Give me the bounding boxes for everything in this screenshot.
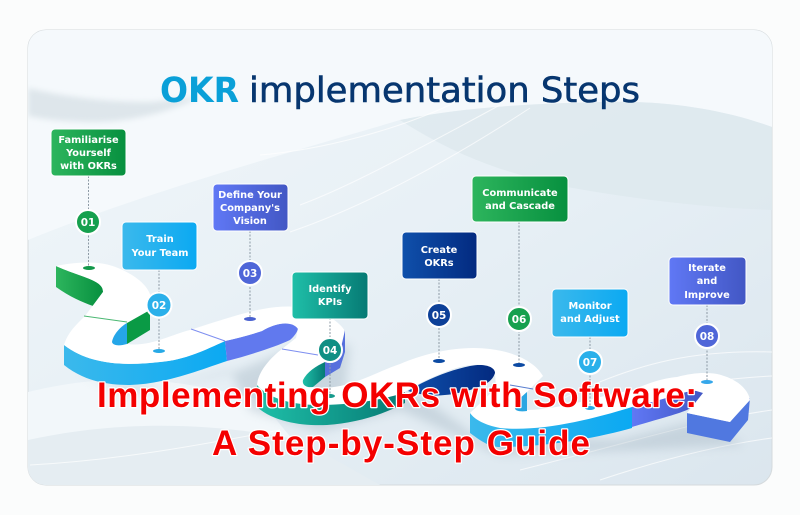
step 05 bbox=[402, 232, 477, 363]
step 08: Iterate bbox=[688, 263, 726, 274]
step 06 bbox=[472, 176, 568, 367]
overlay title: A Step-by-Step Guide bbox=[212, 424, 590, 463]
step 08: and bbox=[697, 276, 717, 287]
step 06: Communicate bbox=[482, 188, 558, 199]
step 01: with OKRs bbox=[60, 161, 117, 172]
segment: step 2 blue side bbox=[64, 341, 227, 385]
segment: step 4 teal side bbox=[257, 385, 405, 425]
overlay title: Implementing OKRs with Software: bbox=[97, 376, 697, 415]
segment: step 3 purple side bbox=[225, 323, 298, 361]
step 05: Create bbox=[421, 245, 458, 256]
heading: OKR bbox=[160, 71, 239, 111]
step 01: Yourself bbox=[65, 148, 112, 159]
segment: step 1 green side bbox=[56, 266, 103, 306]
step 08 bbox=[669, 257, 746, 384]
step 04 bbox=[292, 272, 368, 398]
heading: implementation Steps bbox=[249, 71, 640, 111]
step 01 bbox=[51, 129, 126, 270]
step 04: KPIs bbox=[318, 297, 342, 308]
segment: step 7 purple side bbox=[632, 390, 703, 427]
segment: step 8 end faces bbox=[687, 398, 750, 442]
step 02: Train bbox=[146, 234, 174, 245]
segment: step 6 blue side bbox=[470, 405, 632, 447]
inner curve: step 3 to 4 bbox=[303, 330, 345, 387]
inner curve: step 1 to 2 bbox=[112, 310, 150, 345]
segment divider lines bbox=[84, 316, 533, 389]
step 07: Monitor bbox=[568, 301, 612, 312]
step 02: Your Team bbox=[130, 248, 188, 259]
step 08: Improve bbox=[684, 290, 730, 301]
overlay title bbox=[97, 376, 697, 463]
step 02 bbox=[122, 222, 197, 353]
step 01: 01 bbox=[81, 217, 95, 229]
step 03: Vision bbox=[233, 216, 267, 227]
step 03: Define Your bbox=[218, 190, 282, 201]
step 05: OKRs bbox=[424, 258, 454, 269]
step 07: and Adjust bbox=[560, 314, 620, 325]
step 07: 07 bbox=[583, 357, 597, 369]
step 02: 02 bbox=[152, 300, 166, 312]
step 04: Identify bbox=[309, 284, 352, 295]
inner curve: step 5 dark blue bbox=[408, 365, 495, 395]
step 01: Familiarise bbox=[58, 135, 119, 146]
step 06: and Cascade bbox=[485, 201, 555, 212]
road: 3D path bbox=[56, 262, 750, 455]
step 05: 05 bbox=[432, 310, 446, 322]
step 06: 06 bbox=[512, 314, 526, 326]
step 07 bbox=[552, 289, 628, 410]
inner curve: step 5 to 6 bbox=[515, 392, 527, 411]
step 03: Company's bbox=[220, 203, 280, 214]
step 04: 04 bbox=[323, 345, 337, 357]
step 03 bbox=[213, 184, 288, 321]
step 03: 03 bbox=[243, 268, 257, 280]
step 08: 08 bbox=[700, 331, 714, 343]
white road top surface bbox=[56, 262, 750, 429]
